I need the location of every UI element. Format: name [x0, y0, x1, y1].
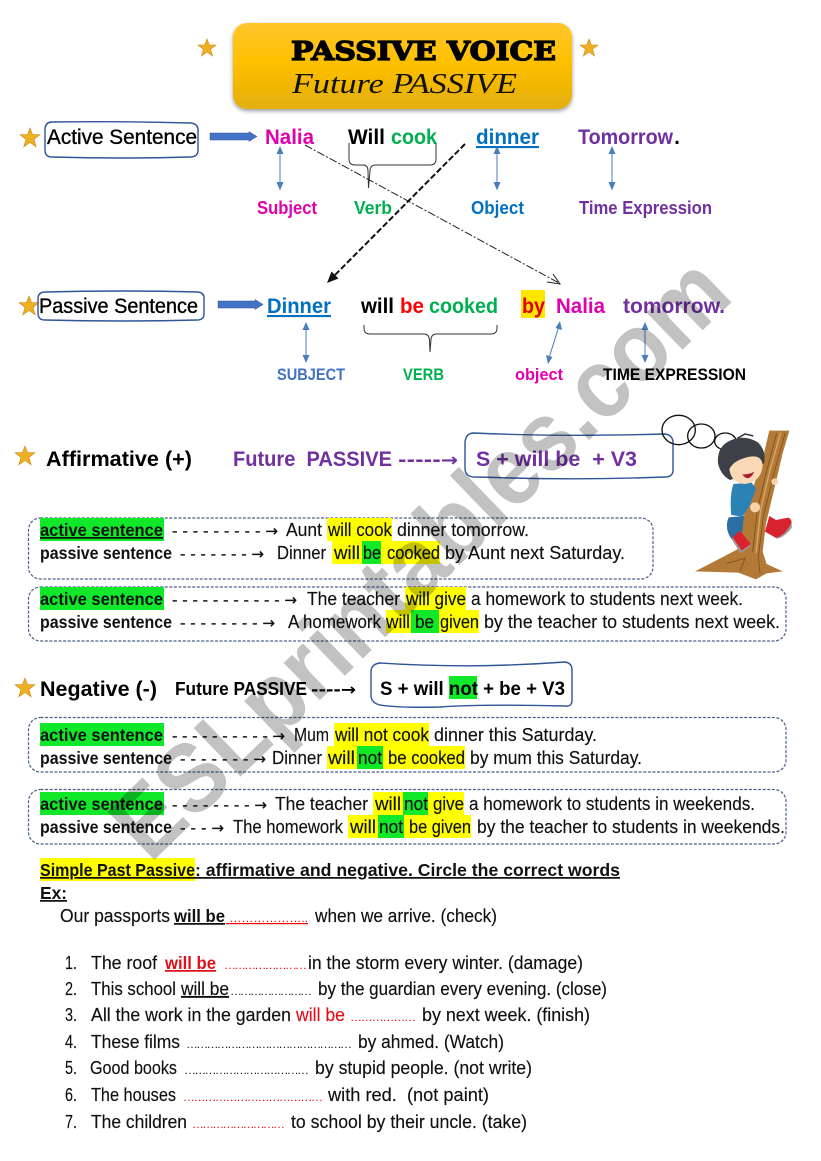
- active line: [40, 589, 743, 609]
- active line: give: [433, 794, 464, 814]
- example sentence: [60, 906, 497, 926]
- passive role labels: object: [515, 365, 563, 384]
- passive line: A homework: [288, 612, 382, 632]
- passive line: by Aunt next Saturday.: [445, 543, 625, 563]
- brace: active verb: [349, 143, 436, 188]
- panel: affirmative example 2: [28, 587, 786, 641]
- item 2: 2.: [65, 979, 77, 999]
- active line: [40, 794, 755, 814]
- item 1: will be: [164, 953, 216, 973]
- section heading: negative: Future PASSIVE: [175, 679, 307, 699]
- item 1: ……………………: [224, 958, 307, 972]
- item 5: [65, 1058, 532, 1078]
- active line: The teacher: [275, 794, 368, 814]
- far boot: [765, 516, 792, 538]
- active line: ---------→: [172, 522, 278, 540]
- panel: affirmative example 1: [28, 518, 653, 579]
- illustration: boy climbing tree: [662, 415, 792, 579]
- passive sentence words: [267, 295, 725, 318]
- section heading: affirmative: [15, 446, 458, 471]
- passive line: Dinner: [277, 543, 326, 563]
- item 3: ………………: [350, 1010, 416, 1024]
- item 7: The children: [91, 1112, 187, 1132]
- watermark: ESLprintables.com: [88, 235, 750, 879]
- item 6: …………………………………: [183, 1090, 323, 1104]
- active line: [40, 725, 597, 745]
- active sentence words: cook: [391, 126, 437, 149]
- passive line: passive sentence: [40, 817, 172, 837]
- highlights: [40, 587, 479, 633]
- passive line: [40, 612, 780, 632]
- item 3: 3.: [65, 1005, 77, 1025]
- item 1: in the storm every winter. (damage): [308, 953, 583, 973]
- section heading: negative: Negative (-): [40, 678, 157, 701]
- passive line: be given: [409, 817, 471, 837]
- arrow: passive to sentence: [218, 300, 263, 310]
- item 1: The roof: [91, 953, 158, 973]
- item 2: [65, 979, 607, 999]
- exercise heading: : affirmative and negative. Circle the correct words: [195, 860, 620, 880]
- passive line: not: [358, 748, 382, 768]
- arrow: active to sentence: [210, 132, 257, 142]
- passive line: given: [440, 612, 479, 632]
- title banner: Future PASSIVE: [291, 68, 517, 100]
- active role labels: Subject: [257, 198, 317, 218]
- passive line: Dinner: [272, 748, 322, 768]
- formula box: affirmative: S + will be + V3: [476, 448, 637, 471]
- passive line: [40, 817, 785, 837]
- highlight: by: [521, 290, 545, 318]
- active role labels: [257, 198, 712, 218]
- passive line: passive sentence: [40, 748, 172, 768]
- item 3: will be: [295, 1005, 345, 1025]
- arrow: object to subject: [327, 144, 465, 283]
- shirt: [731, 483, 756, 517]
- active line: [40, 520, 529, 540]
- active sentence words: Will: [348, 126, 385, 149]
- active role labels: Object: [471, 198, 524, 218]
- passive line: not: [379, 817, 403, 837]
- passive line: by the teacher to students next week.: [484, 612, 780, 632]
- example sentence: will be: [173, 906, 225, 926]
- icon: affirmative star: [15, 446, 35, 465]
- passive role labels: VERB: [403, 366, 444, 384]
- item 4: …………………………………………: [186, 1037, 352, 1051]
- active line: a homework to students in weekends.: [469, 794, 755, 814]
- active line: ----------→: [172, 727, 285, 745]
- formula box: affirmative: [465, 433, 673, 479]
- item 7: 7.: [65, 1112, 77, 1132]
- formula box: negative: [371, 662, 572, 707]
- active arrows: [276, 146, 616, 190]
- title banner: [233, 23, 572, 109]
- item 4: These films: [91, 1032, 180, 1052]
- passive sentence words: cooked: [429, 295, 498, 318]
- active sentence words: .: [674, 126, 680, 149]
- passive sentence words: Dinner: [267, 295, 331, 318]
- passive line: -------→: [180, 750, 266, 768]
- panel: negative example 1: [28, 718, 786, 772]
- active sentence words: Tomorrow: [578, 126, 674, 149]
- active sentence row: [20, 122, 680, 158]
- active line: will not cook: [334, 725, 430, 745]
- passive sentence words: Nalia: [556, 295, 605, 318]
- exercise heading: Simple Past Passive: [40, 860, 195, 880]
- icon: active star: [20, 128, 40, 147]
- item 2: ……………………: [230, 984, 312, 998]
- icon: negative star: [15, 678, 35, 697]
- section heading: affirmative: Affirmative (+): [46, 448, 192, 471]
- active line: Mum: [294, 725, 329, 745]
- passive sentence words: be: [400, 295, 424, 318]
- passive line: [40, 748, 642, 768]
- item 4: 4.: [65, 1032, 77, 1052]
- active line: will give: [405, 589, 466, 609]
- passive role labels: TIME EXPRESSION: [603, 365, 746, 384]
- formula box: negative: S + will not + be + V3: [380, 679, 565, 700]
- passive sentence words: will: [360, 295, 394, 318]
- hair: [718, 438, 765, 480]
- item 6: with red. (not paint): [327, 1085, 489, 1105]
- item 5: by stupid people. (not write): [315, 1058, 532, 1078]
- icon: title star left: [198, 39, 216, 56]
- highlights: [40, 518, 440, 564]
- active role labels: Verb: [354, 198, 392, 218]
- passive sentence words: tomorrow.: [623, 295, 725, 318]
- active line: Aunt: [286, 520, 322, 540]
- section heading: affirmative: -----→: [398, 450, 458, 471]
- example sentence: when we arrive. (check): [314, 906, 497, 926]
- item 5: 5.: [65, 1058, 77, 1078]
- item 2: by the guardian every evening. (close): [318, 979, 607, 999]
- active line: not: [404, 794, 428, 814]
- passive line: passive sentence: [40, 543, 172, 563]
- passive line: cooked: [387, 543, 440, 563]
- item 1: [65, 953, 583, 973]
- tree: [695, 431, 789, 579]
- active line: The teacher: [307, 589, 400, 609]
- icon: passive star: [19, 296, 39, 315]
- section heading: negative: ----→: [311, 680, 356, 699]
- exercise heading: [40, 858, 620, 903]
- item 3: [65, 1005, 590, 1025]
- panel: negative example 2: [28, 790, 786, 844]
- passive sentence words: by: [522, 295, 545, 318]
- passive line: will: [349, 817, 376, 837]
- item 6: The houses: [91, 1085, 176, 1105]
- item 2: This school: [91, 979, 176, 999]
- highlights: [40, 723, 465, 769]
- active sentence words: dinner: [476, 126, 539, 149]
- active line: active sentence: [40, 589, 163, 609]
- active line: active sentence: [40, 794, 163, 814]
- label box: active sentence: Active Sentence: [47, 126, 197, 149]
- passive role labels: SUBJECT: [277, 366, 345, 384]
- active sentence words: [265, 126, 680, 149]
- example sentence: ………………..: [226, 911, 308, 925]
- hands: [750, 502, 760, 512]
- icon: title star right: [580, 39, 598, 56]
- passive line: by the teacher to students in weekends.: [477, 817, 785, 837]
- example sentence: Our passports: [60, 906, 170, 926]
- passive line: be cooked: [388, 748, 465, 768]
- active line: dinner tomorrow.: [397, 520, 529, 540]
- label box: passive sentence: Passive Sentence: [39, 295, 198, 318]
- passive line: be: [415, 612, 434, 632]
- item 4: [65, 1032, 504, 1052]
- passive line: The homework: [233, 817, 344, 837]
- passive arrows: [302, 321, 648, 364]
- passive line: -------→: [180, 545, 264, 563]
- item 3: All the work in the garden: [91, 1005, 291, 1025]
- passive line: ---→: [180, 819, 224, 837]
- label box: active sentence: [45, 122, 198, 158]
- jeans: [727, 516, 744, 539]
- active line: will: [374, 794, 401, 814]
- active line: --------→: [172, 796, 267, 814]
- item 5: ………………………………: [184, 1063, 309, 1077]
- item 7: ………………………: [192, 1117, 285, 1131]
- active role labels: Time Expression: [579, 198, 712, 218]
- near boot: [731, 531, 752, 553]
- passive line: --------→: [180, 614, 275, 632]
- passive line: will: [333, 543, 360, 563]
- item 3: by next week. (finish): [422, 1005, 590, 1025]
- item 6: 6.: [65, 1085, 77, 1105]
- active sentence words: Nalia: [265, 126, 314, 149]
- thought bubbles: [662, 415, 736, 450]
- active line: active sentence: [40, 520, 163, 540]
- item 5: Good books: [90, 1058, 177, 1078]
- brace: passive verb: [364, 325, 497, 352]
- passive line: by mum this Saturday.: [470, 748, 642, 768]
- item 7: to school by their uncle. (take): [291, 1112, 527, 1132]
- passive line: will: [385, 612, 410, 632]
- section heading: negative: [15, 678, 356, 701]
- active line: a homework to students next week.: [471, 589, 743, 609]
- active line: -----------→: [172, 591, 297, 609]
- passive line: passive sentence: [40, 612, 172, 632]
- active line: dinner this Saturday.: [434, 725, 597, 745]
- passive line: [40, 543, 625, 563]
- section heading: affirmative: Future PASSIVE: [233, 448, 392, 471]
- passive sentence row: [19, 290, 725, 321]
- item 2: will be: [180, 979, 229, 999]
- passive line: will: [327, 748, 355, 768]
- item 1: 1.: [65, 953, 77, 973]
- item 6: [65, 1085, 489, 1105]
- active line: will cook: [327, 520, 393, 540]
- exercise heading: Ex:: [40, 883, 67, 903]
- item 7: [65, 1112, 527, 1132]
- title banner: PASSIVE VOICE: [291, 37, 556, 67]
- highlights: [40, 792, 471, 838]
- active line: active sentence: [40, 725, 163, 745]
- passive line: be: [363, 543, 381, 563]
- exercise list: [65, 953, 607, 1132]
- arrow: subject to agent: [305, 145, 560, 284]
- passive role labels: [277, 365, 746, 384]
- face: [729, 456, 763, 484]
- item 4: by ahmed. (Watch): [358, 1032, 504, 1052]
